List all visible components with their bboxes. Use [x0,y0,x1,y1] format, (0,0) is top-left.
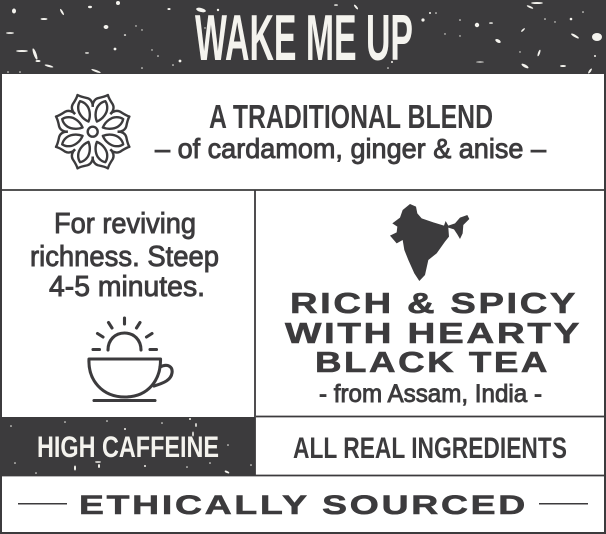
heading: rich and spicy: RICH & SPICY [290,288,578,320]
heading: rich and spicy [285,288,582,379]
heading: rich and spicy: WITH HEARTY [285,318,582,350]
panel: header band [0,0,606,74]
heading: rich and spicy: BLACK TEA [315,347,550,379]
text: ethically sourced: ETHICALLY SOURCED [79,490,528,520]
icon: star anise [52,91,133,172]
text: steeping instructions: 4-5 minutes. [49,271,205,303]
title: WAKE ME UP [195,1,413,74]
divider line: left [18,503,67,504]
divider line: right [539,503,588,504]
text: steeping instructions: richness. Steep [30,241,219,273]
panel: traditional blend [52,91,546,172]
panel: rich and spicy [285,204,582,408]
panel: steeping [30,208,219,400]
text: steeping instructions: For reviving [54,208,196,240]
text: origin: - from Assam, India - [319,380,542,408]
text: high caffeine: HIGH CAFFEINE [37,431,219,464]
icon: teacup with sunrise [89,318,172,400]
text: steeping instructions [30,208,219,303]
panel: high caffeine [0,417,255,476]
heading: a traditional blend: A TRADITIONAL BLEND [209,98,493,135]
icon: map of India [390,204,469,281]
text: blend ingredients: – of cardamom, ginger & anise – [155,133,546,164]
